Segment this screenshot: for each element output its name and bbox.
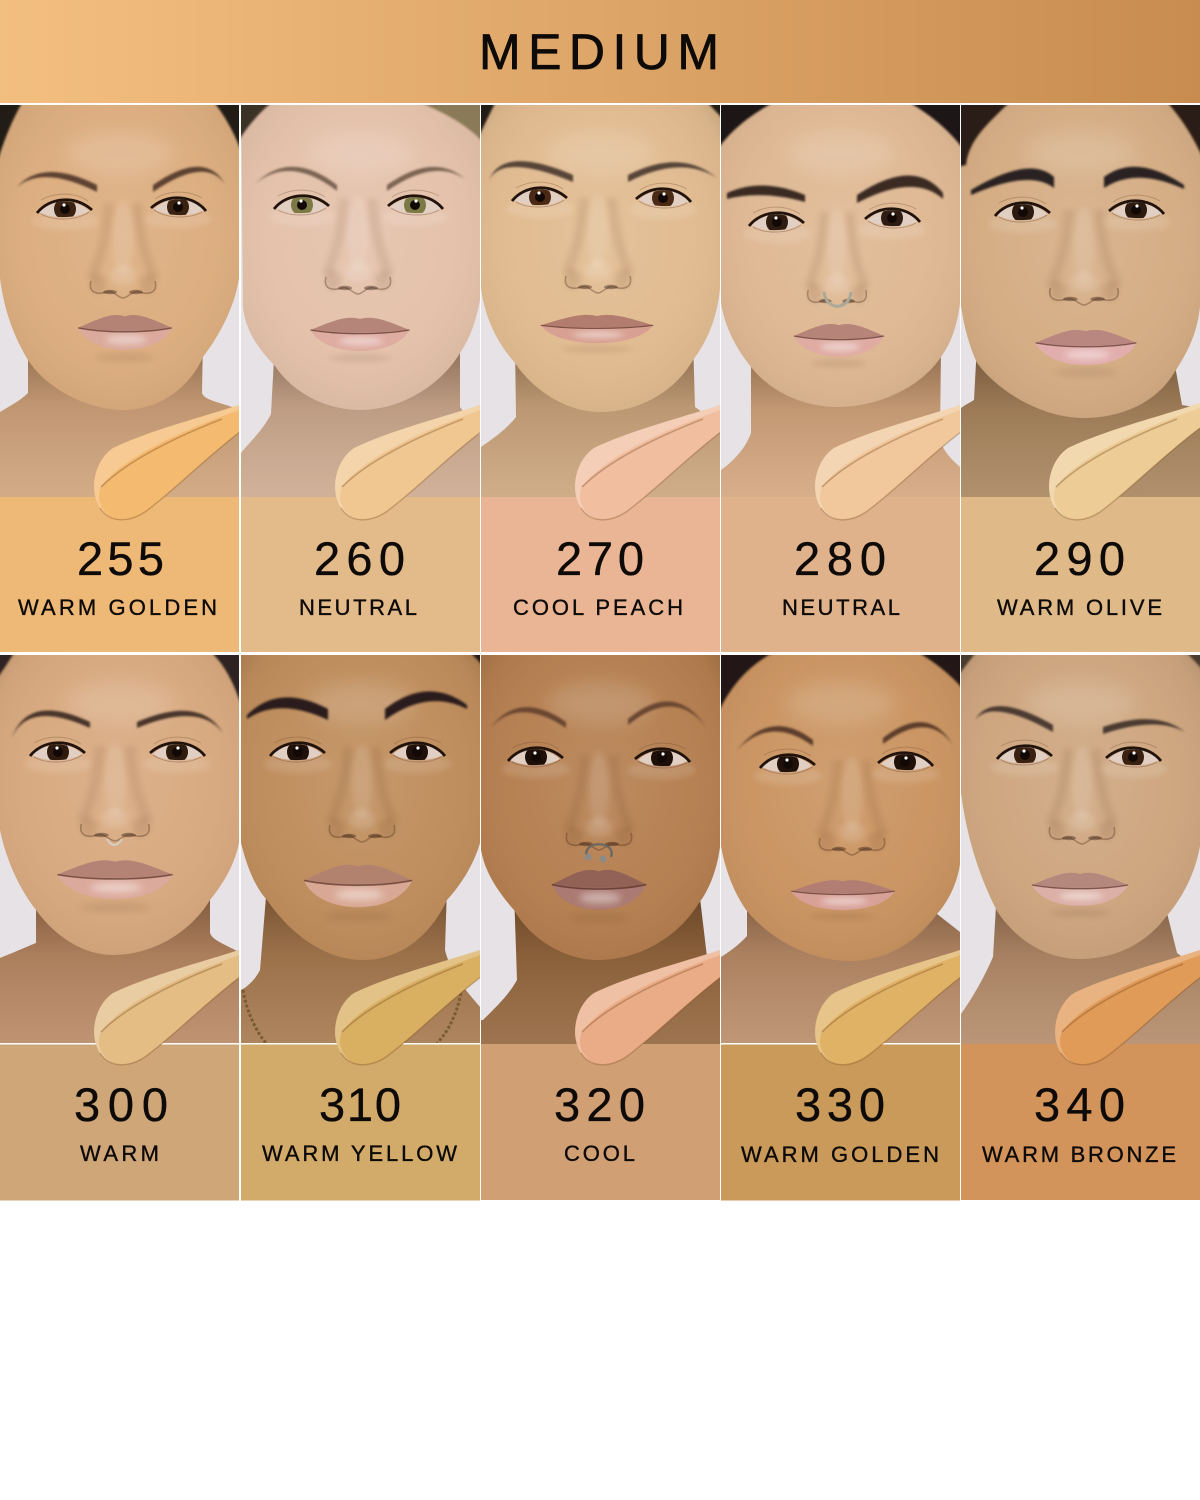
hair xyxy=(0,105,239,158)
neck and shoulders xyxy=(241,340,480,497)
eyebrows xyxy=(491,701,706,728)
shade number: 280 xyxy=(794,532,886,585)
lips xyxy=(791,880,895,920)
nose xyxy=(819,757,885,855)
hair xyxy=(957,651,1200,677)
card: 270 cool peach xyxy=(477,101,726,652)
card: 310 warm yellow xyxy=(241,651,486,1200)
thin white divider xyxy=(0,1043,239,1044)
neck and shoulders xyxy=(721,890,960,1044)
nose xyxy=(1049,746,1115,844)
face xyxy=(481,105,720,412)
shade swatch block xyxy=(721,1044,960,1200)
shade swatch block xyxy=(961,497,1200,652)
shade name: WARM GOLDEN xyxy=(741,1142,939,1167)
nose xyxy=(325,196,391,294)
face xyxy=(721,105,960,407)
eyes xyxy=(502,742,696,779)
thin white divider xyxy=(721,1043,960,1044)
face xyxy=(481,655,720,960)
lips xyxy=(304,865,412,921)
product smear xyxy=(815,403,966,520)
hair xyxy=(469,651,484,667)
hair xyxy=(957,101,1200,167)
face xyxy=(721,655,960,961)
product smear xyxy=(335,403,486,520)
product smear xyxy=(1049,403,1200,520)
shade number: 260 xyxy=(314,532,405,585)
shade name: NEUTRAL xyxy=(782,595,900,620)
eyebrows xyxy=(975,706,1185,734)
shade number: 340 xyxy=(1034,1078,1125,1131)
shade number: 300 xyxy=(74,1078,168,1131)
lips xyxy=(78,315,172,362)
shade number: 270 xyxy=(556,532,644,585)
shade name: WARM BRONZE xyxy=(982,1142,1176,1167)
nose xyxy=(80,743,150,841)
thin white divider xyxy=(241,1043,480,1044)
shade swatch block xyxy=(961,1044,1200,1200)
eyes xyxy=(24,737,211,773)
nose xyxy=(329,744,395,842)
product smear xyxy=(1055,948,1200,1065)
lips xyxy=(552,870,646,923)
card: 280 neutral xyxy=(717,101,966,652)
shade swatch block xyxy=(241,1044,480,1200)
neck and shoulders xyxy=(961,890,1200,1044)
shade swatch block xyxy=(0,1044,239,1200)
eyebrows xyxy=(727,175,943,203)
neck and shoulders xyxy=(0,358,239,497)
neck and shoulders xyxy=(721,345,960,497)
eyes xyxy=(31,192,212,230)
lips xyxy=(310,318,410,362)
nose xyxy=(90,200,156,298)
card: 260 neutral xyxy=(237,101,486,652)
lips xyxy=(541,315,653,352)
eyebrows xyxy=(971,167,1184,195)
shade name: WARM YELLOW xyxy=(262,1141,457,1166)
eyes xyxy=(264,737,451,773)
face xyxy=(961,105,1200,418)
nose xyxy=(566,752,632,850)
hair xyxy=(717,651,964,715)
hair xyxy=(481,105,720,136)
shade swatch block xyxy=(0,497,239,652)
face xyxy=(241,655,480,960)
shade name: WARM GOLDEN xyxy=(18,595,217,620)
neck and shoulders xyxy=(481,890,720,1044)
eyes xyxy=(754,747,939,785)
product smear xyxy=(94,403,245,520)
shade number: 255 xyxy=(77,532,164,585)
card: 290 warm olive xyxy=(957,101,1200,652)
lips xyxy=(1036,330,1136,377)
hair xyxy=(721,105,960,148)
necklace xyxy=(243,990,461,1043)
eyebrows xyxy=(17,167,225,192)
lips xyxy=(57,860,173,912)
shade number: 310 xyxy=(319,1078,401,1131)
face xyxy=(0,655,239,955)
shade number: 320 xyxy=(554,1078,645,1131)
card: 340 warm bronze xyxy=(957,651,1200,1200)
eyebrows xyxy=(255,167,465,191)
product smear xyxy=(575,948,726,1065)
eyes xyxy=(989,195,1170,233)
shade number: 290 xyxy=(1034,532,1125,585)
eyebrows xyxy=(489,161,717,182)
lips xyxy=(794,324,884,367)
shade number: 330 xyxy=(795,1078,885,1131)
product smear xyxy=(335,948,486,1065)
eyebrows xyxy=(737,722,953,750)
neck and shoulders xyxy=(481,359,720,497)
card: 255 warm golden xyxy=(0,101,245,652)
nose xyxy=(565,195,631,293)
eyes xyxy=(506,182,697,219)
nose xyxy=(807,209,867,307)
eyebrows xyxy=(12,710,223,737)
shade swatch block xyxy=(721,497,960,652)
shade swatch block xyxy=(481,497,720,652)
header band xyxy=(0,0,1200,103)
product smear xyxy=(815,948,966,1065)
shade swatch block xyxy=(241,497,480,652)
lips xyxy=(1032,873,1128,917)
face xyxy=(0,105,239,410)
hair xyxy=(0,651,243,710)
shade name: NEUTRAL xyxy=(299,595,417,620)
nose xyxy=(1049,207,1119,305)
product smear xyxy=(94,948,245,1065)
product smear xyxy=(575,403,726,520)
eyes xyxy=(991,740,1167,778)
face xyxy=(241,105,480,410)
card: 320 cool xyxy=(481,655,726,1200)
shade name: COOL PEACH xyxy=(513,595,683,620)
card: 300 warm xyxy=(0,651,245,1200)
septum ring xyxy=(824,292,851,306)
card: 330 warm golden xyxy=(717,651,966,1200)
eyes xyxy=(743,203,926,243)
neck and shoulders xyxy=(961,345,1200,497)
neck and shoulders xyxy=(0,890,239,1044)
shade swatch block xyxy=(481,1044,720,1200)
shade name: COOL xyxy=(564,1141,635,1166)
face xyxy=(961,655,1200,959)
title: MEDIUM xyxy=(479,24,719,80)
shade name: WARM OLIVE xyxy=(997,595,1162,620)
hair xyxy=(241,105,480,140)
shade name: WARM xyxy=(80,1141,159,1166)
eyes xyxy=(272,190,444,223)
nose ring xyxy=(107,839,122,845)
eyebrows xyxy=(247,691,467,720)
neck and shoulders xyxy=(241,885,480,1044)
septum ring xyxy=(584,844,612,862)
